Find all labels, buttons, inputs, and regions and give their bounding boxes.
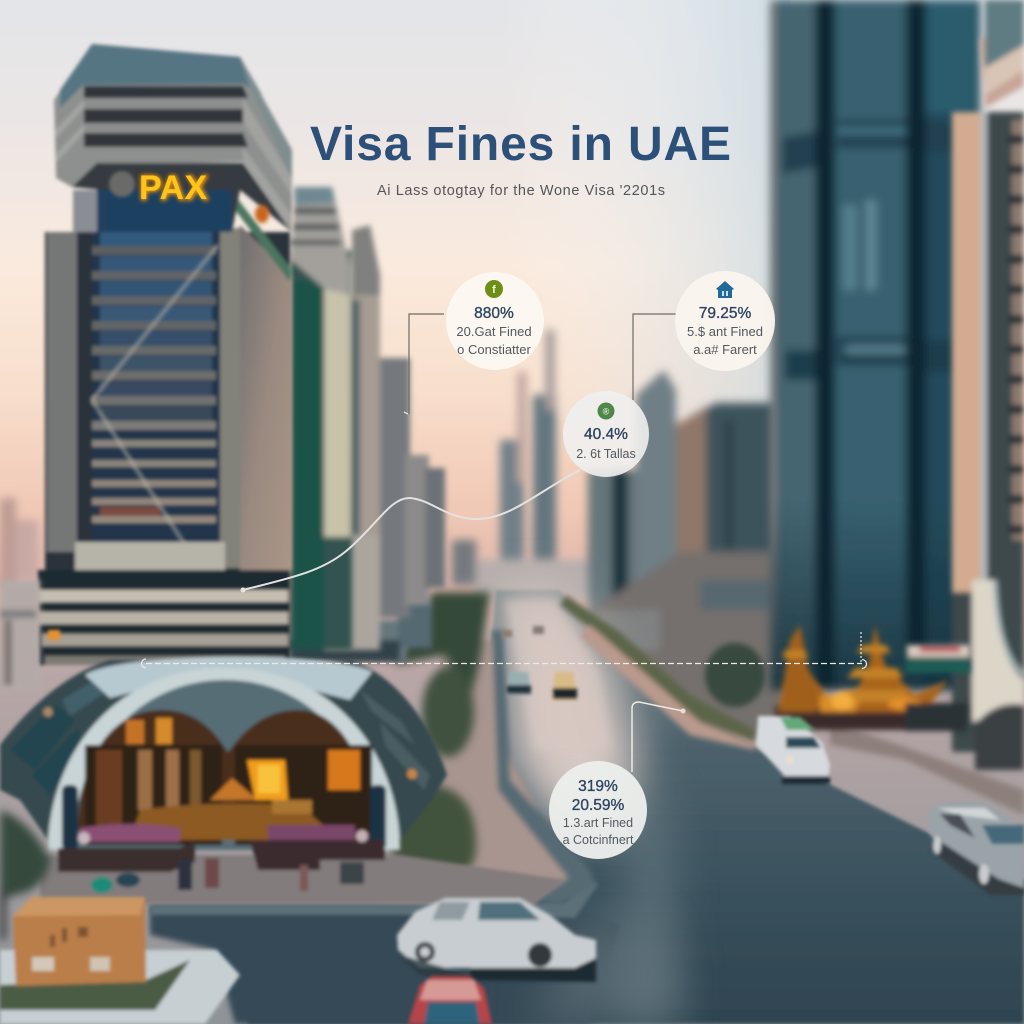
icon: green info badge: f <box>492 284 496 296</box>
right glass tower <box>770 0 980 690</box>
scene: main PAX tower <box>38 44 292 665</box>
curved trend line <box>240 470 580 592</box>
icon: blue house <box>716 281 734 298</box>
scene: left sidewalk, median and greenery <box>380 592 595 905</box>
scene: distant skyline <box>0 330 596 600</box>
sign: PAX: PAX <box>139 169 207 207</box>
white arch <box>48 668 400 850</box>
tower diagonal brace <box>92 245 218 545</box>
white van <box>756 716 830 784</box>
icon: green badge: ® <box>603 406 610 416</box>
cars in distance <box>502 626 577 700</box>
scene: receding left towers <box>324 225 445 650</box>
roof crown <box>54 44 292 232</box>
pillars <box>62 785 78 850</box>
sign: PAX <box>109 169 269 223</box>
white SUV <box>397 898 596 985</box>
subtitle: Ai Lass otogtay for the Wone Visa '2201s <box>377 183 665 199</box>
silver car right <box>928 802 1024 895</box>
callout: 40.4%: 40.4% <box>584 426 628 443</box>
callout: 319% 20.59%: 1.3.art Fined <box>563 816 633 830</box>
callout: 319% 20.59%: a Cotcinfnert <box>563 833 634 847</box>
callout: 319% 20.59% <box>549 761 647 859</box>
far-right curved building <box>952 0 1024 770</box>
lounge seating and flowers <box>80 824 180 842</box>
visitors <box>178 860 192 890</box>
scene: second tower <box>290 187 352 650</box>
interior <box>78 710 372 830</box>
plaza floor <box>40 855 565 904</box>
leader line: top-right callout <box>633 314 676 400</box>
scene: mid-right buildings <box>588 370 785 745</box>
dome pavilion <box>0 657 565 904</box>
roof wedge <box>85 657 372 700</box>
leader line: bottom callout <box>632 702 686 772</box>
scene: right sidewalk and planting <box>560 595 1024 815</box>
callout: 79.25%: 5.$ ant Fined <box>687 324 763 339</box>
callout: 880%: 20.Gat Fined <box>456 324 532 339</box>
callout: 79.25%: 79.25% <box>699 305 751 322</box>
cardboard box and planter <box>0 897 240 1024</box>
callout: 319% 20.59%: 20.59% <box>572 797 624 814</box>
callout: 79.25%: a.a# Farert <box>693 342 757 357</box>
scene: road <box>150 590 1024 1024</box>
callout: 40.4%: 2. 6t Tallas <box>576 447 636 461</box>
red car <box>408 976 492 1024</box>
side lights <box>407 769 417 779</box>
title: Visa Fines in UAE <box>310 118 731 171</box>
glazed shell <box>0 660 447 840</box>
dashed horizontal measure line <box>142 632 867 668</box>
callout: 79.25% <box>675 271 775 371</box>
left foreground tree <box>0 810 50 940</box>
tower body <box>45 232 290 592</box>
right plaza with lit pagoda shops <box>775 625 970 731</box>
callout: 319% 20.59%: 319% <box>578 778 618 795</box>
sign: PAX: PAX <box>139 169 210 208</box>
tower base <box>38 570 290 665</box>
scene: small left-edge structures <box>0 580 40 690</box>
callout: 40.4% <box>563 391 649 477</box>
scene: low storefronts along the road <box>290 600 432 662</box>
callout: 880% <box>446 272 544 370</box>
callout: 880%: o Constiatter <box>457 342 532 357</box>
leader line: top-left callout <box>404 314 444 414</box>
callout: 880%: 880% <box>474 305 514 322</box>
